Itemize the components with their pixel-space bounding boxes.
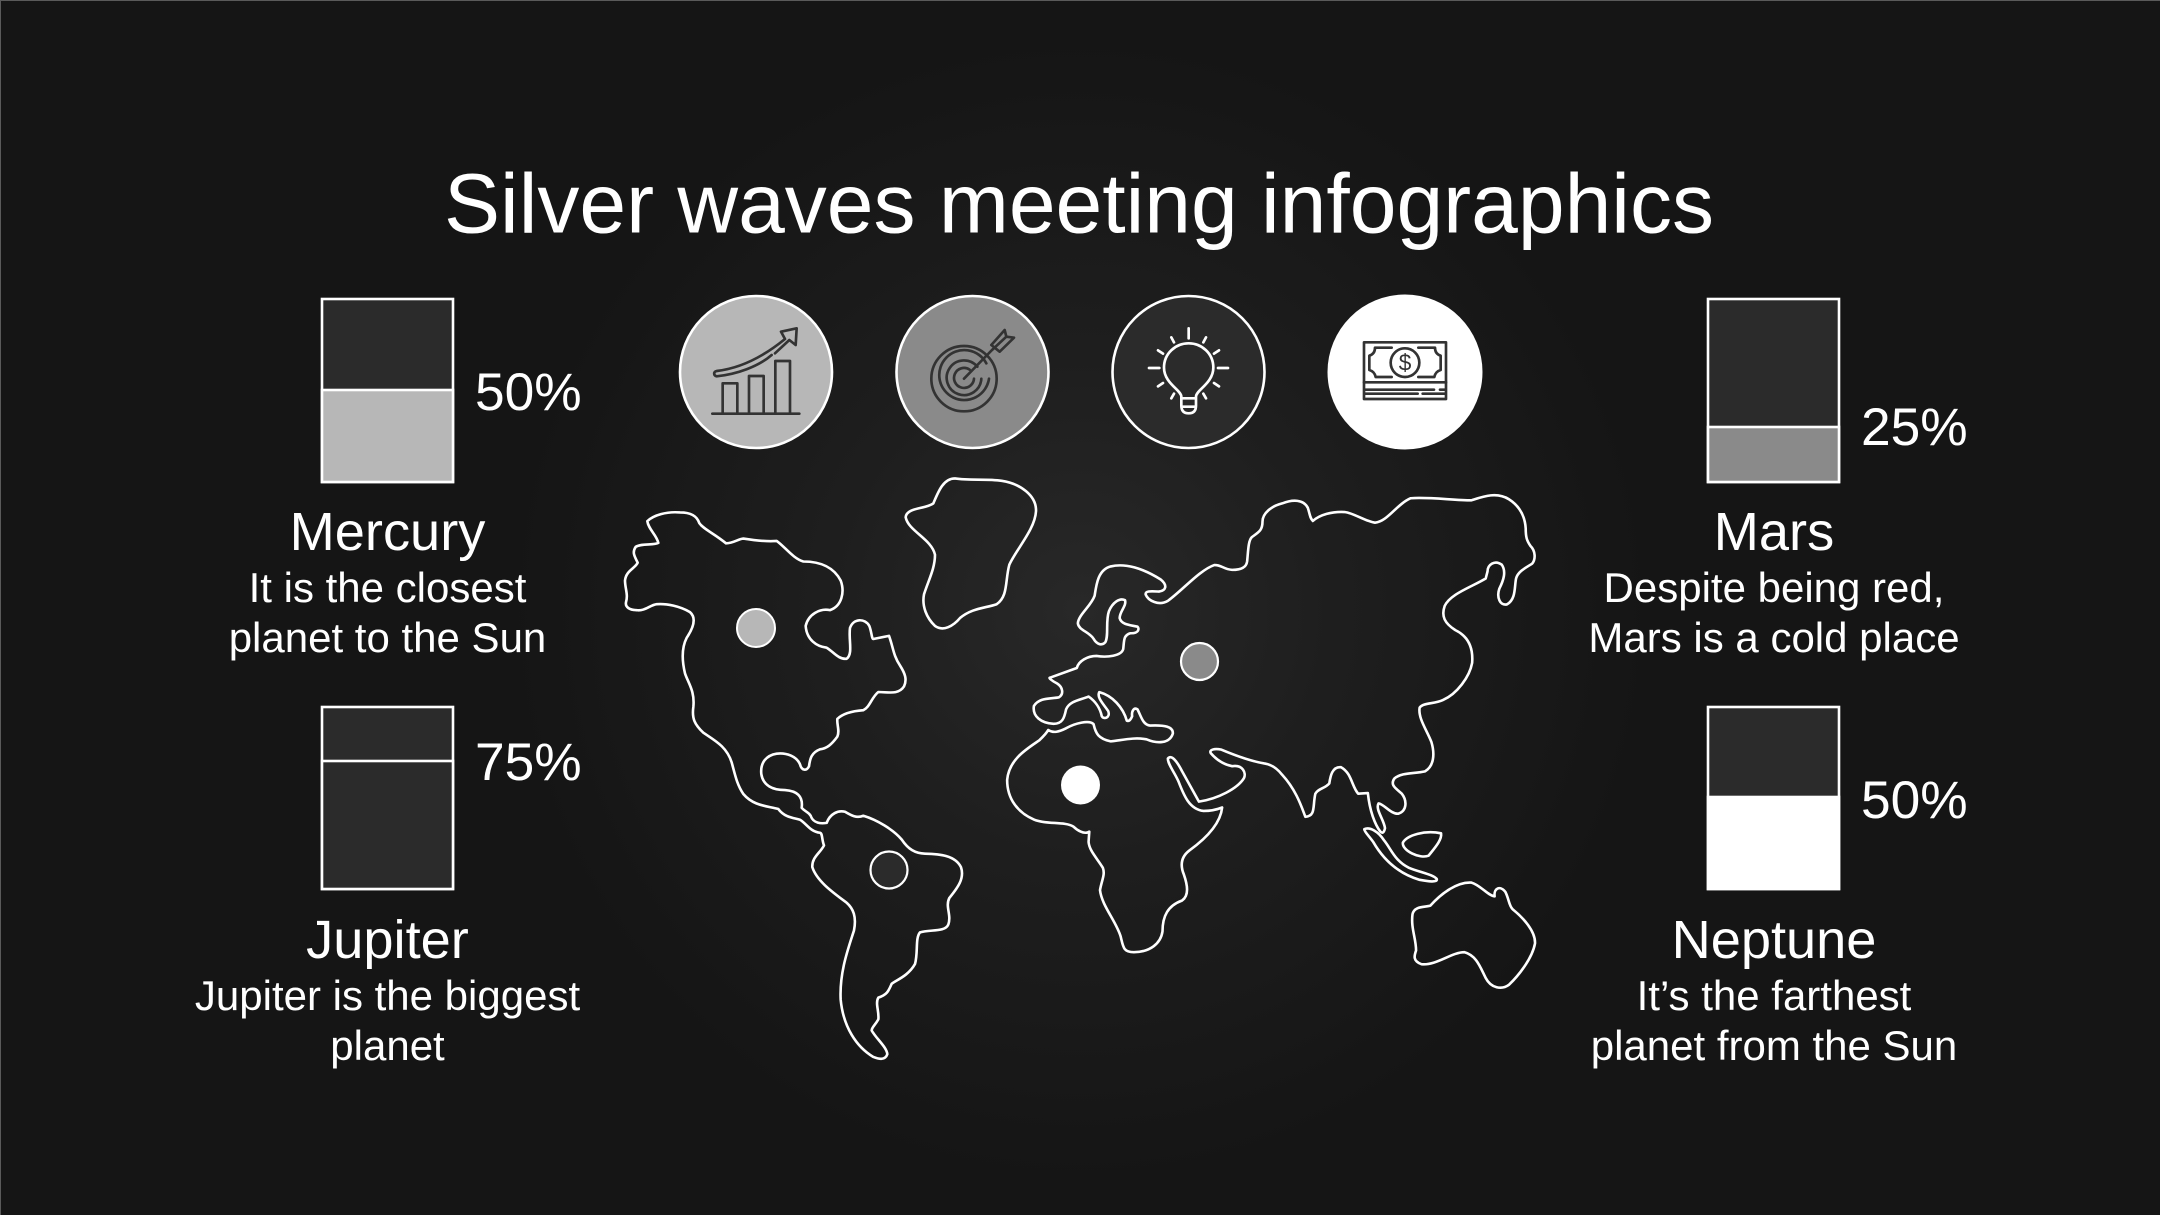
text: Neptune description: It’s the farthest <box>1637 972 1911 1019</box>
icon: banknotes: $ <box>1399 350 1412 376</box>
text: Jupiter description: Jupiter is the biggest <box>195 972 580 1019</box>
text: Mercury description: It is the closest <box>249 564 526 611</box>
world map <box>625 478 1535 1059</box>
bar: Jupiter 75% <box>322 707 453 889</box>
heading: Jupiter: Jupiter <box>306 910 469 970</box>
text: Mars description: Despite being red, <box>1604 564 1944 611</box>
heading: Mars: Mars <box>1714 502 1834 562</box>
panel: Mars <box>1588 299 1968 661</box>
value: Neptune: 50% <box>1861 771 1968 830</box>
bar: Mars 25% <box>1708 299 1839 482</box>
heading: Mercury: Mercury <box>290 502 485 562</box>
icon: light bulb <box>1112 296 1264 448</box>
text: Jupiter description: planet <box>330 1022 445 1069</box>
text: Neptune description: planet from the Sun <box>1591 1022 1957 1069</box>
heading: Neptune: Neptune <box>1672 910 1876 970</box>
icon: banknotes <box>1328 294 1482 450</box>
marker: North America <box>737 609 775 647</box>
marker: South America <box>870 852 908 888</box>
panel: Mercury <box>229 299 582 661</box>
value: Jupiter: 75% <box>475 733 582 792</box>
text: Mars description: Mars is a cold place <box>1588 614 1960 661</box>
panel: Neptune <box>1591 707 1968 1069</box>
marker: Africa <box>1061 766 1100 804</box>
value: Mars: 25% <box>1861 398 1968 457</box>
map: Americas <box>625 478 1036 1059</box>
icon: growth chart <box>680 296 832 448</box>
bar: Neptune 50% <box>1708 707 1839 889</box>
icon: target <box>896 296 1048 448</box>
marker: Asia <box>1181 643 1218 680</box>
value: Mercury: 50% <box>475 363 582 422</box>
text: Mercury description: planet to the Sun <box>229 614 546 661</box>
title: Silver waves meeting infographics <box>444 156 1714 250</box>
map: Eurasia, Africa and Oceania <box>1007 495 1535 988</box>
panel: Jupiter <box>195 707 582 1069</box>
bar: Mercury 50% <box>322 299 453 482</box>
